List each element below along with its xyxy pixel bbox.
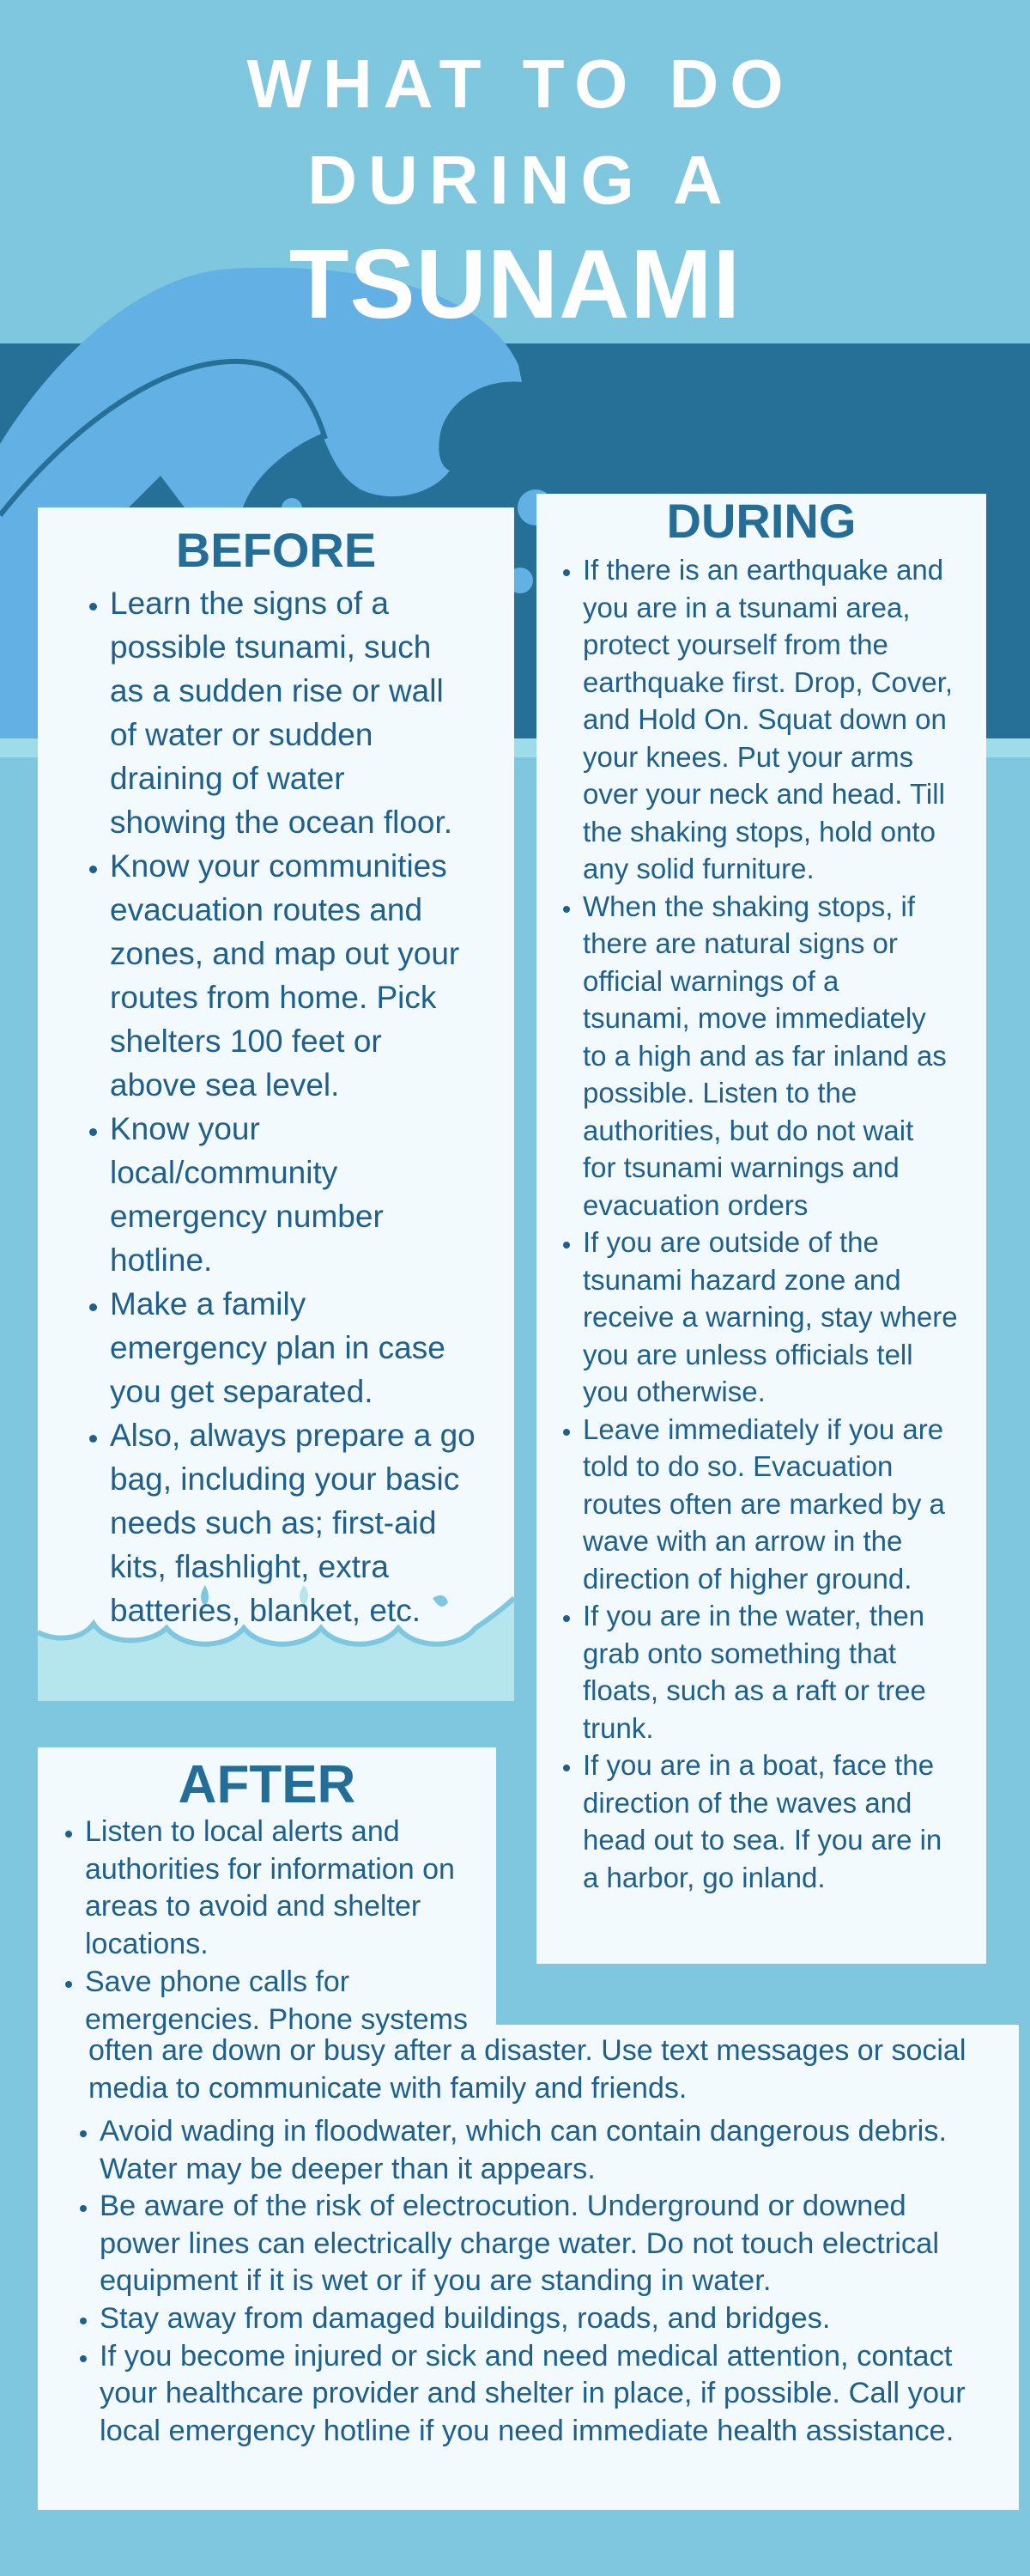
during list: protect yourself from the (583, 629, 888, 660)
after list top: areas to avoid and shelter (85, 1890, 421, 1923)
after list top: locations. (85, 1928, 209, 1960)
before list: hotline. (110, 1242, 212, 1278)
during list: When the shaking stops, if (583, 890, 915, 922)
before list: emergency number (110, 1199, 384, 1234)
after list bottom (80, 2115, 966, 2447)
after list top: emergencies. Phone systems (85, 2003, 468, 2036)
before list: of water or sudden (110, 717, 373, 752)
before list: as a sudden rise or wall (110, 673, 444, 708)
during list: over your neck and head. Till (583, 778, 945, 810)
during list: there are natural signs or (583, 927, 898, 959)
during list: grab onto something that (583, 1637, 896, 1669)
before list: emergency plan in case (110, 1330, 445, 1365)
during list: told to do so. Evacuation (583, 1450, 893, 1482)
during list (563, 554, 958, 1893)
during list: to a high and as far inland as (583, 1039, 947, 1072)
during list: direction of the waves and (583, 1786, 912, 1819)
bottom wave decoration (38, 1585, 514, 1701)
during list: head out to sea. If you are in (583, 1824, 942, 1856)
before heading: BEFORE (176, 523, 376, 577)
before list: possible tsunami, such (110, 629, 431, 665)
during list: tsunami, move immediately (583, 1002, 926, 1034)
before list: needs such as; first-aid (110, 1505, 436, 1540)
during list: a harbor, go inland. (583, 1862, 826, 1893)
during list: and Hold On. Squat down on (583, 703, 947, 735)
during list: for tsunami warnings and (583, 1151, 900, 1183)
during list: tsunami hazard zone and (583, 1264, 901, 1295)
after list bottom: your healthcare provider and shelter in place, if possible. Call your (100, 2377, 966, 2409)
before list: Learn the signs of a (110, 586, 389, 621)
during list: evacuation orders (583, 1188, 808, 1221)
title: TSUNAMI (289, 230, 741, 339)
before list: draining of water (110, 761, 345, 796)
light strip (0, 738, 1030, 757)
after continued text (88, 2034, 966, 2105)
before list: above sea level. (110, 1067, 339, 1103)
during heading: DURING (667, 494, 856, 548)
after list bottom: Water may be deeper than it appears. (100, 2153, 596, 2185)
during list: If you are in the water, then (583, 1600, 924, 1631)
before list: Know your communities (110, 848, 447, 884)
during list: trunk. (583, 1712, 654, 1743)
after list top: authorities for information on (85, 1853, 455, 1886)
after list bottom: equipment if it is wet or if you are standing in water. (100, 2264, 771, 2297)
during list: If you are outside of the (583, 1226, 879, 1258)
during list: routes often are marked by a (583, 1487, 945, 1520)
during list: the shaking stops, hold onto (583, 816, 936, 847)
during list: Leave immediately if you are (583, 1413, 943, 1444)
before list: bag, including your basic (110, 1461, 459, 1497)
after list bottom: Be aware of the risk of electrocution. Underground or downed (100, 2190, 906, 2222)
title (246, 46, 795, 339)
before list: evacuation routes and (110, 892, 422, 927)
before list: kits, flashlight, extra (110, 1549, 389, 1584)
before list: shelters 100 feet or (110, 1024, 382, 1059)
during list: direction of higher ground. (583, 1563, 912, 1594)
after list top: Listen to local alerts and (85, 1815, 400, 1848)
after list top: Save phone calls for (85, 1965, 349, 1998)
after list bottom: local emergency hotline if you need immediate health assistance. (100, 2415, 954, 2447)
during list: official warnings of a (583, 965, 839, 996)
after list bottom: power lines can electrically charge water. Do not touch electrical (100, 2227, 939, 2260)
after heading: AFTER (179, 1755, 355, 1814)
after continued text: media to communicate with family and friends. (88, 2072, 687, 2105)
during list: receive a warning, stay where (583, 1301, 958, 1333)
during list: wave with an arrow in the (583, 1525, 902, 1557)
after list bottom: If you become injured or sick and need medical attention, contact (100, 2340, 952, 2372)
during list: your knees. Put your arms (583, 740, 913, 773)
during list: earthquake first. Drop, Cover, (583, 666, 953, 697)
during list: you are in a tsunami area, (583, 591, 911, 623)
during list: you are unless officials tell (583, 1338, 913, 1370)
before list: routes from home. Pick (110, 980, 436, 1015)
after list bottom: Avoid wading in floodwater, which can contain dangerous debris. (100, 2115, 947, 2148)
title: DURING A (307, 142, 734, 218)
wave illustration (0, 268, 548, 738)
before list: you get separated. (110, 1374, 373, 1409)
during list: floats, such as a raft or tree (583, 1674, 926, 1706)
during list: authorities, but do not wait (583, 1115, 913, 1145)
dark band (0, 343, 1030, 738)
before list: showing the ocean floor. (110, 805, 452, 840)
after continued text: often are down or busy after a disaster. Use text messages or social (88, 2034, 966, 2067)
panel: after (38, 1747, 1019, 2510)
panel: before (38, 507, 514, 1701)
during list: you otherwise. (583, 1376, 766, 1407)
before list: zones, and map out your (110, 936, 459, 971)
during list: any solid furniture. (583, 853, 815, 884)
during list: possible. Listen to the (583, 1077, 857, 1109)
before list: local/community (110, 1155, 337, 1190)
before list: Also, always prepare a go (110, 1418, 476, 1453)
after list top (65, 1815, 468, 2036)
before list (89, 586, 476, 1628)
after list bottom: Stay away from damaged buildings, roads, and bridges. (100, 2302, 830, 2335)
before list: Know your (110, 1111, 260, 1146)
during list: If there is an earthquake and (583, 554, 943, 586)
during list: If you are in a boat, face the (583, 1749, 934, 1781)
before list: batteries, blanket, etc. (110, 1593, 421, 1628)
panel: during (536, 494, 986, 1964)
title: WHAT TO DO (246, 46, 795, 122)
before list: Make a family (110, 1286, 306, 1321)
